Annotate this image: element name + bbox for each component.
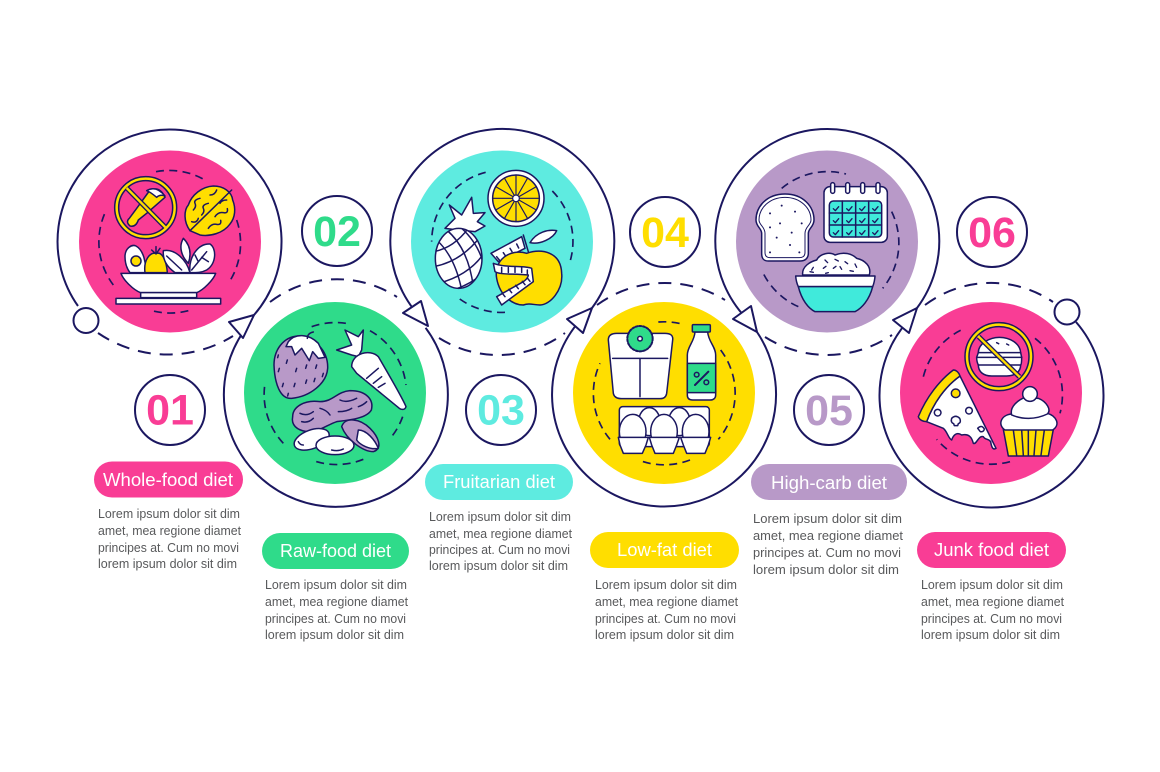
icon: end marker: [1054, 300, 1080, 324]
text: raw-food description: lorem ipsum dolor sit dim: [265, 627, 404, 642]
panel: raw-food disc: [244, 302, 426, 484]
label: junk food diet: [917, 532, 1066, 568]
number badge 06: 06: [968, 209, 1016, 257]
label: high-carb diet: High-carb diet: [771, 473, 887, 493]
panel: high-carb disc: [736, 150, 918, 332]
icon: milk bottle: [687, 325, 716, 400]
panel: fruitarian disc: [411, 150, 593, 332]
icon: weighing scale: [608, 326, 673, 399]
icon: salad bowl: [116, 238, 221, 304]
arrow: step 2 to 3: [403, 301, 428, 326]
panel: connected circular path: [58, 129, 1104, 508]
number badge 01: [135, 375, 205, 445]
number badge 02: [302, 196, 372, 266]
icons: fruitarian and low-fat: [432, 170, 735, 465]
icon: pizza slice: [918, 370, 996, 449]
text: high-carb description: amet, mea regione diamet: [753, 528, 903, 543]
icon: calendar: [824, 183, 887, 242]
arrow: step 5 to 6: [893, 308, 917, 333]
icon: peanut and nuts: [291, 391, 379, 455]
icon: egg carton: [618, 407, 711, 453]
label: raw-food diet: [262, 533, 409, 569]
text: low-fat description: lorem ipsum dolor sit dim: [595, 627, 734, 642]
icon: orange slice: [488, 170, 544, 226]
label: high-carb diet: [751, 464, 907, 500]
number badge 01: 01: [146, 386, 194, 434]
label: whole-food diet: [94, 462, 243, 498]
icon: start marker: [74, 308, 98, 333]
icons: high-carb and junk food: [756, 172, 1062, 464]
dashed ring: low-fat: [593, 322, 735, 465]
number badge 04: 04: [641, 209, 689, 257]
number badge 04: [630, 197, 700, 267]
label: fruitarian diet: [425, 464, 573, 500]
number badge 05: 05: [805, 387, 853, 435]
dashed ring: junk food: [923, 329, 1062, 464]
text: whole-food description: amet, mea regione diamet: [98, 523, 241, 538]
panel: low-fat disc: [573, 302, 755, 484]
text: whole-food description: Lorem ipsum dolor sit dim: [98, 506, 240, 521]
text: fruitarian description: amet, mea regione diamet: [429, 526, 572, 541]
icon: no burger: [965, 323, 1033, 391]
text: high-carb description: lorem ipsum dolor sit dim: [753, 562, 899, 577]
panel: junk food disc: [900, 302, 1082, 484]
icon: bread: [756, 194, 814, 261]
icon: strawberry: [274, 332, 328, 398]
label: junk food diet: Junk food diet: [934, 540, 1049, 560]
dashed ring: whole-food: [99, 170, 241, 313]
icon: pineapple: [433, 197, 487, 290]
text: low-fat description: Lorem ipsum dolor sit dim: [595, 577, 737, 592]
dashed ring: raw-food: [264, 323, 406, 465]
icon: carrot: [337, 330, 406, 409]
text: fruitarian description: Lorem ipsum dolor sit dim: [429, 509, 571, 524]
panel: whole-food disc: [79, 150, 261, 332]
dashed ring: high-carb: [762, 172, 899, 307]
icon: walnut: [185, 186, 235, 235]
text: junk food description: amet, mea regione diamet: [921, 594, 1064, 609]
icon: no meat: [115, 177, 177, 239]
icons: whole-food and raw-food: [99, 170, 406, 465]
label: fruitarian diet: Fruitarian diet: [443, 472, 555, 492]
text: junk food description: Lorem ipsum dolor sit dim: [921, 577, 1063, 592]
icon: cupcake: [1001, 387, 1057, 456]
text: whole-food description: lorem ipsum dolor sit dim: [98, 556, 237, 571]
number badge 06: [957, 197, 1027, 267]
text: high-carb description: Lorem ipsum dolor sit dim: [753, 511, 902, 526]
icon: apple with measuring tape: [491, 230, 562, 305]
text: raw-food description: principes at. Cum no movi: [265, 611, 406, 626]
dashed ring: fruitarian: [432, 172, 573, 312]
text: low-fat description: principes at. Cum no movi: [595, 611, 736, 626]
label: low-fat diet: [590, 532, 739, 568]
icon: rice bowl: [796, 253, 875, 312]
text: whole-food description: principes at. Cum no movi: [98, 540, 239, 555]
text: fruitarian description: lorem ipsum dolor sit dim: [429, 558, 568, 573]
label: whole-food diet: Whole-food diet: [103, 470, 233, 490]
text: raw-food description: Lorem ipsum dolor sit dim: [265, 577, 407, 592]
text: junk food description: lorem ipsum dolor sit dim: [921, 627, 1060, 642]
arrow: step 3 to 4: [567, 308, 592, 333]
label: low-fat diet: Low-fat diet: [617, 540, 712, 560]
label: raw-food diet: Raw-food diet: [280, 541, 391, 561]
text: fruitarian description: principes at. Cum no movi: [429, 542, 570, 557]
number badge 02: 02: [313, 208, 361, 256]
text: high-carb description: principes at. Cum no movi: [753, 545, 901, 560]
number badge 03: 03: [477, 386, 525, 434]
text: raw-food description: amet, mea regione diamet: [265, 594, 408, 609]
number badge 05: [794, 375, 864, 445]
text: low-fat description: amet, mea regione diamet: [595, 594, 738, 609]
arrow: step 4 to 5: [733, 306, 757, 332]
number badge 03: [466, 375, 536, 445]
arrow: step 1 to 2: [229, 315, 254, 338]
text: junk food description: principes at. Cum no movi: [921, 611, 1062, 626]
